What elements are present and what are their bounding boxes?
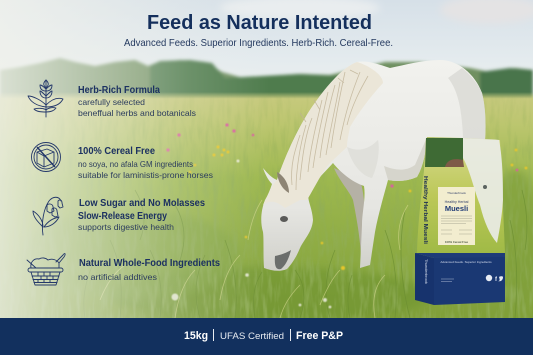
bag label: Muesli [445,204,468,213]
feature: cereal free: suitable for laministis-prone horses [78,170,213,180]
background: meadow [0,92,533,323]
mane [263,62,383,208]
bag navy base [415,253,434,305]
icon: whole-food basket [27,254,65,285]
feature: cereal free: no soya, no afala GM ingredients [78,159,193,169]
feature: low sugar [78,198,205,232]
feature: whole-food ingredients [78,258,220,282]
feature: cereal free [78,146,213,180]
feature: whole-food ingredients: no artificial addtives [78,272,157,282]
left white fade overlay [0,0,270,320]
feature: low sugar: Slow-Release Energy [78,211,167,222]
feature: herb-rich formula: carefully selected [78,97,145,107]
eye and muzzle [280,216,288,222]
feature: low sugar: supports digestive health [78,222,174,232]
feature: whole-food ingredients: Natural Whole-Food Ingredients [79,258,220,269]
background: treeline [0,58,533,100]
bag base text: Advanced Feeds. Superior Ingredients [440,260,492,264]
bag label [438,187,475,245]
feature: herb-rich formula: beneffual herbs and botanicals [78,108,196,118]
footer bar: UFAS Certified [220,331,284,342]
bag trees [425,138,463,167]
bag horse [463,138,503,243]
subtitle: Advanced Feeds. Superior Ingredients. Herb-Rich. Cereal-Free. [124,37,393,49]
footer bar [0,318,533,355]
feature: low sugar: Low Sugar and No Molasses [79,198,205,209]
background: sky [0,0,533,100]
bag label: 100% Cereal Free [445,240,469,244]
footer bar: Free P&P [296,330,343,342]
icon: bluebell flower [33,197,63,235]
bag side title: Healthy Herbal Muesli [422,176,428,245]
horse [261,60,486,271]
icon: no cereal box [32,142,60,172]
product bag [415,138,505,305]
body, neck, head and foreleg [261,60,486,271]
feature: herb-rich formula [78,85,196,118]
icon: herb sprig [28,80,63,117]
feature: herb-rich formula: Herb-Rich Formula [78,85,160,96]
chest and belly shading [384,137,427,181]
bag photo front [417,138,505,253]
title: Feed as Nature Intented [147,12,372,34]
feature: cereal free: 100% Cereal Free [78,146,155,157]
hind leg [334,168,365,255]
bag label: Healthy Herbal [445,200,469,204]
ear [277,172,289,193]
product bag: f [495,277,498,283]
bag label: Thunderbrook [447,191,466,195]
product bag: Thunderbrook [424,259,429,284]
footer bar: 15kg [184,330,208,342]
